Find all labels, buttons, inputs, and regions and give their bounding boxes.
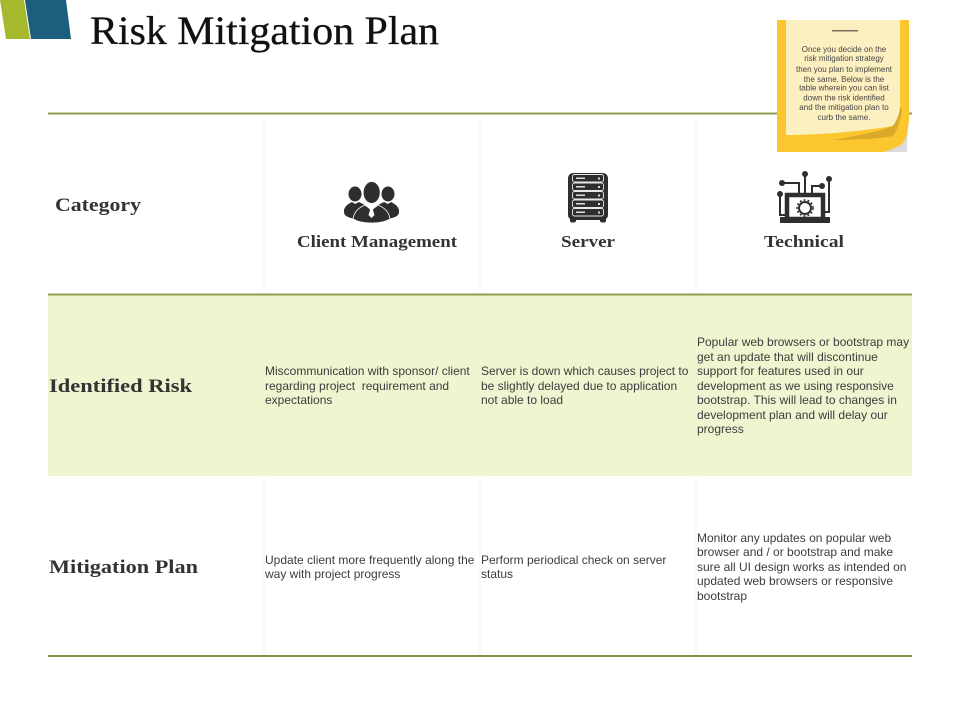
text: technical mitigation: Monitor any updates on popular web xyxy=(697,531,891,545)
sticky note callout: down the risk identified xyxy=(803,94,885,102)
sticky note callout: table wherein you can list xyxy=(799,84,890,92)
text: server risk: Server is down which causes project to xyxy=(481,364,689,378)
icon: client management people xyxy=(344,182,399,223)
text: client mitigation: way with project progress xyxy=(264,567,400,581)
text: technical risk: progress xyxy=(697,422,744,436)
text: client risk: expectations xyxy=(265,393,332,407)
row heading: category: Category xyxy=(55,195,142,216)
sticky note callout: curb the same. xyxy=(818,113,870,122)
identified risk row background xyxy=(48,295,912,476)
icon: server rack xyxy=(568,173,608,222)
text: technical mitigation: sure all UI design works as intended on xyxy=(697,560,906,574)
text: technical mitigation: updated web browsers or responsive xyxy=(697,574,893,588)
sticky note callout: then you plan to implement xyxy=(796,65,893,74)
column heading: client management: Client Management xyxy=(297,232,457,251)
text: technical risk: support for features used in our xyxy=(697,364,864,378)
text: server mitigation: status xyxy=(481,567,513,581)
icon: technical circuit laptop xyxy=(777,171,832,223)
sticky note callout: Once you decide on the xyxy=(802,45,887,54)
text: server risk: be slightly delayed due to application xyxy=(481,379,677,393)
text: technical risk: bootstrap. This will lead to changes in xyxy=(697,393,897,407)
row heading: mitigation plan: Mitigation Plan xyxy=(49,557,198,578)
sticky note callout xyxy=(777,20,909,152)
sticky note callout: risk mitigation strategy xyxy=(804,54,884,63)
text: client risk: Miscommunication with sponsor/ client xyxy=(265,364,470,378)
sticky note callout: the same. Below is the xyxy=(804,75,885,84)
column heading: server: Server xyxy=(561,232,616,251)
column heading: technical: Technical xyxy=(764,232,844,251)
text: technical risk: Popular web browsers or bootstrap may xyxy=(697,335,909,349)
row heading: identified risk: Identified Risk xyxy=(49,376,193,397)
text: client risk: regarding project requirement and xyxy=(265,379,449,393)
corner logo shapes xyxy=(0,0,71,39)
table lines xyxy=(48,114,912,656)
title: Risk Mitigation Plan xyxy=(90,8,439,53)
text: technical risk: get an update that will discontinue xyxy=(697,350,878,364)
text: technical risk: development as we using responsive xyxy=(697,379,894,393)
text: server mitigation: Perform periodical check on server xyxy=(481,553,666,567)
text: technical mitigation: browser and / or bootstrap and make xyxy=(697,545,893,559)
sticky note callout: and the mitigation plan to xyxy=(799,103,889,112)
text: server risk: not able to load xyxy=(481,393,563,407)
text: technical risk: development plan and will delay our xyxy=(697,408,888,422)
text: technical mitigation: bootstrap xyxy=(697,589,747,603)
text: client mitigation: Update client more frequently along the xyxy=(265,553,475,567)
